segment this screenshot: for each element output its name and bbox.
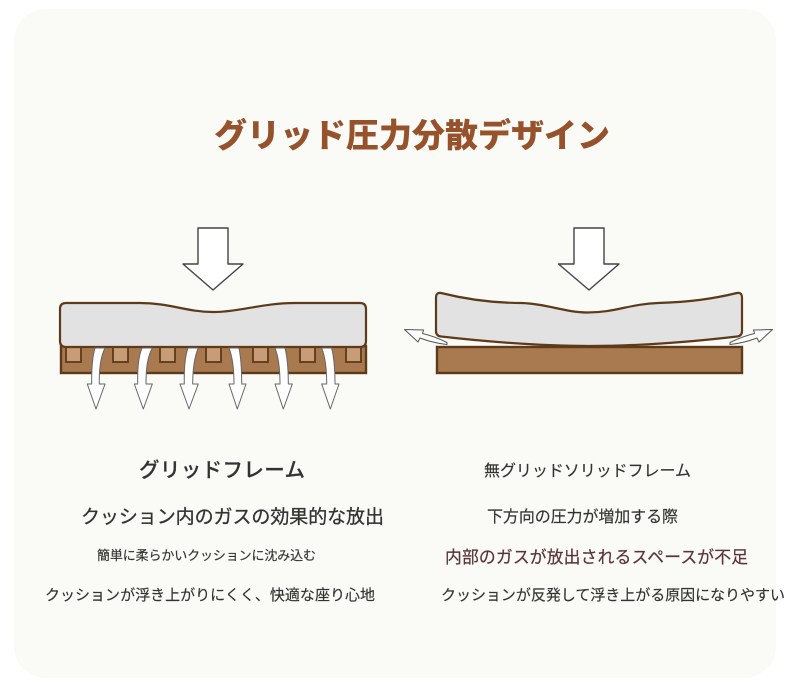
arrow: downward pressure (183, 228, 243, 290)
cushion (60, 303, 366, 347)
heading: grid frame: グリッドフレーム (139, 459, 305, 482)
solid frame base (437, 347, 742, 373)
text: easy sink: 簡単に柔らかいクッションに沈み込む (97, 548, 316, 563)
title: グリッド圧力分散デザイン (214, 117, 610, 154)
text: no space for gas: 内部のガスが放出されるスペースが不足 (445, 548, 748, 567)
arrow: gas escaping right (730, 330, 772, 344)
grid frame base (61, 346, 366, 373)
panel: grid frame diagram (60, 228, 366, 409)
text: gas release: クッション内のガスの効果的な放出 (81, 506, 384, 528)
text: comfort: クッションが浮き上がりにくく、快適な座り心地 (45, 587, 375, 604)
text: downward pressure increase: 下方向の圧力が増加する際 (487, 508, 678, 526)
heading: solid frame: 無グリッドソリッドフレーム (484, 462, 691, 480)
cushion (436, 293, 742, 346)
arrow: downward pressure (558, 228, 619, 290)
text: rebound: クッションが反発して浮き上がる原因になりやすい (441, 587, 785, 604)
arrows: gas released downward (87, 348, 339, 409)
arrow: gas escaping left (404, 330, 447, 344)
panel: solid frame diagram (404, 228, 772, 373)
